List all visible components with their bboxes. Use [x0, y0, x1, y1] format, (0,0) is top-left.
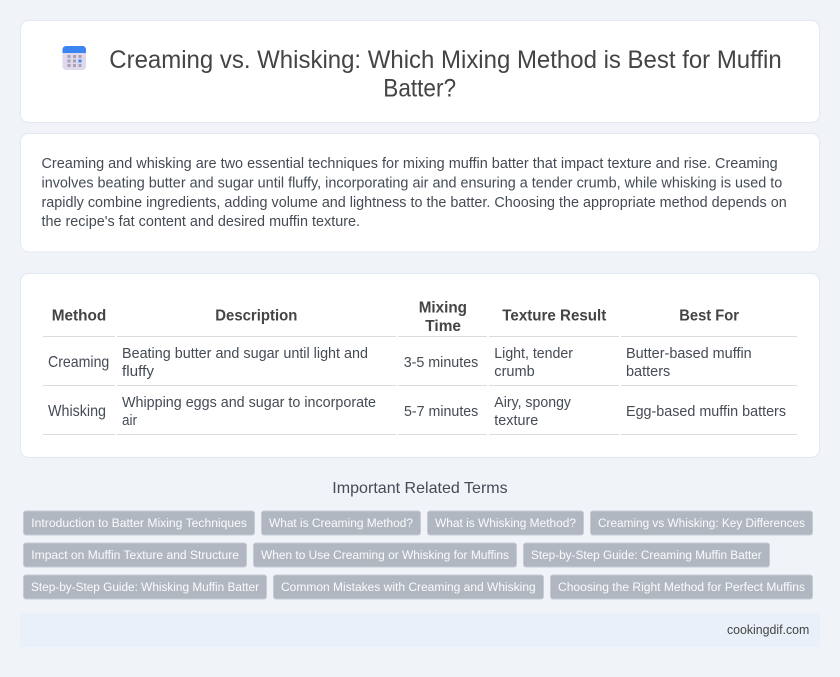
table row: whisking: air	[122, 413, 137, 429]
footer: cookingdif.com	[727, 622, 809, 637]
table row: creaming: Beating butter and sugar until light and	[122, 346, 368, 362]
table row: creaming: 3-5 minutes	[404, 355, 478, 371]
table row: whisking: texture	[494, 413, 538, 429]
table row: creaming: Creaming	[48, 354, 109, 371]
panel: header	[20, 20, 820, 122]
panel: comparison table	[20, 274, 820, 458]
tag: What is Whisking Method?	[435, 516, 576, 530]
tag	[590, 511, 812, 535]
tag: Impact on Muffin Texture and Structure	[31, 548, 239, 562]
table row: whisking: Whipping eggs and sugar to incorporate	[122, 395, 376, 411]
table header row: Mixing	[419, 300, 467, 316]
icon: calendar	[62, 46, 86, 70]
tag	[428, 511, 584, 535]
table header row: Best For	[679, 308, 739, 324]
table row: whisking: Whisking	[48, 403, 106, 420]
tag	[24, 575, 266, 599]
table row: creaming	[43, 346, 797, 386]
table row: whisking	[43, 395, 797, 435]
tag: Step-by-Step Guide: Creaming Muffin Batter	[531, 548, 762, 562]
text block: description paragraph: involves beating butter and sugar until fluffy, incorporating air and ensuring a tender crumb, while whisking is used to	[42, 175, 782, 191]
title: Batter?	[383, 76, 456, 102]
tag	[24, 511, 254, 535]
table row: creaming: crumb	[494, 364, 535, 380]
table row: whisking: Airy, spongy	[494, 395, 572, 411]
table header row: Time	[425, 318, 461, 335]
tag: Step-by-Step Guide: Whisking Muffin Batter	[31, 580, 259, 594]
tag	[254, 543, 516, 567]
tag: Creaming vs Whisking: Key Differences	[598, 516, 805, 530]
tag	[24, 543, 246, 567]
table row: creaming: Butter-based muffin	[626, 346, 752, 362]
footer	[20, 613, 820, 647]
table row: creaming: batters	[626, 364, 670, 380]
tag	[524, 543, 770, 567]
table row: creaming: Light, tender	[494, 346, 573, 362]
text block: description paragraph: the recipe's fat content and desired muffin texture.	[42, 214, 360, 230]
table header row: Texture Result	[502, 308, 606, 324]
text block: description paragraph	[42, 156, 787, 230]
tag: Choosing the Right Method for Perfect Muffins	[558, 580, 805, 594]
text block: description paragraph: Creaming and whisking are two essential techniques for mixing muffin batter that impact texture and rise. Creaming	[42, 156, 778, 172]
tag: When to Use Creaming or Whisking for Muffins	[261, 548, 509, 562]
table row: creaming: fluffy	[122, 364, 155, 380]
heading: important related terms: Important Related Terms	[332, 480, 508, 497]
tag	[274, 575, 544, 599]
tag list: related terms	[24, 511, 812, 599]
tag	[550, 575, 812, 599]
tag	[262, 511, 420, 535]
panel: description	[20, 134, 820, 252]
title: Creaming vs. Whisking: Which Mixing Method is Best for Muffin	[109, 47, 782, 74]
tag: Common Mistakes with Creaming and Whisking	[281, 580, 536, 594]
title	[109, 47, 782, 102]
table header row: Description	[215, 308, 297, 324]
table row: whisking: 5-7 minutes	[404, 404, 478, 420]
tag: Introduction to Batter Mixing Techniques	[31, 516, 247, 530]
text block: description paragraph: rapidly combine ingredients, adding volume and lightness to the batter. Choosing the appropriate method depends on	[42, 195, 787, 211]
table header row: Method	[52, 308, 106, 324]
table header row	[43, 300, 797, 337]
table row: whisking: Egg-based muffin batters	[626, 404, 786, 420]
tag: What is Creaming Method?	[269, 516, 413, 530]
